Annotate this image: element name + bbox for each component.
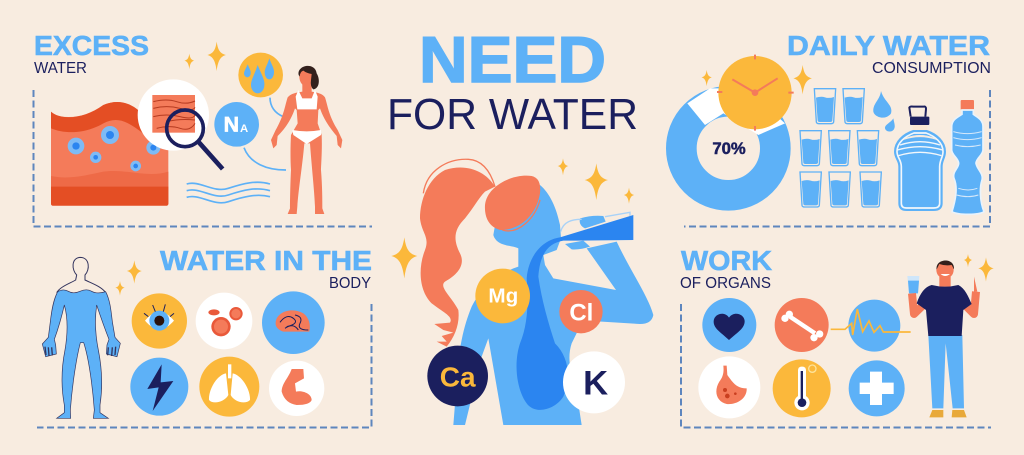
magnifier [138, 79, 223, 169]
sparkles [184, 42, 226, 71]
sparkles [702, 65, 812, 94]
heading: daily water consumption [787, 30, 991, 77]
badge: Ca [427, 346, 488, 406]
panel: daily water illustration [681, 55, 984, 214]
sodium badge: A [240, 123, 248, 135]
sparkles [391, 158, 634, 278]
glasses [800, 89, 881, 207]
heading: work of organs: OF ORGANS [680, 275, 771, 292]
bottle outline [561, 212, 630, 232]
heading: work of organs [680, 245, 772, 292]
icon: lightning [130, 358, 188, 416]
water stream [517, 215, 633, 410]
title: FOR WATER [387, 90, 638, 139]
icon: blood cells [196, 293, 252, 349]
heading: water in the body: WATER IN THE [160, 245, 372, 276]
badge: K [563, 351, 625, 413]
heading: excess water [34, 30, 149, 77]
body silhouette [453, 185, 653, 425]
badge: Mg [475, 269, 530, 323]
hand on bottle [565, 216, 606, 249]
badge: Cl [559, 290, 603, 333]
water drops [873, 91, 895, 132]
waves [187, 182, 270, 203]
plastic bottle [952, 100, 984, 214]
panel frame: body [37, 304, 372, 428]
donut chart 70%: 70% [712, 139, 746, 158]
water drops badge [238, 53, 283, 117]
panel frame: daily water [684, 90, 990, 226]
skin cross-section [51, 102, 168, 206]
donut chart 70% [681, 88, 785, 195]
hair [420, 159, 540, 347]
panel frame: organs [681, 304, 991, 428]
badge: Mg: Mg [488, 285, 518, 308]
sparkles [964, 254, 994, 282]
panel: work of organs illustration [698, 254, 994, 418]
body silhouette [42, 257, 120, 418]
badge: Ca: Ca [440, 362, 476, 393]
central figure drinking water [391, 158, 653, 425]
icon: lungs [199, 357, 259, 417]
heading: daily water consumption: CONSUMPTION [872, 60, 991, 77]
sparkles [115, 260, 142, 296]
clock [717, 55, 794, 131]
heading: excess water: WATER [34, 60, 87, 77]
icon: eye [132, 293, 187, 349]
large bottle [895, 106, 945, 210]
man with glass [907, 260, 977, 417]
heading: water in the body [160, 245, 372, 292]
icon: muscle [269, 361, 324, 416]
panel frame: excess water [34, 90, 372, 226]
icon: brain [262, 291, 325, 354]
panel: excess water illustration [51, 42, 342, 214]
heading: work of organs: WORK [681, 245, 772, 276]
heading: daily water consumption: DAILY WATER [787, 30, 990, 61]
heading: excess water: EXCESS [34, 30, 149, 61]
panel: water in the body illustration [42, 257, 325, 418]
icon: bone [775, 298, 829, 352]
sodium badge: N [224, 113, 239, 137]
icon: heart [702, 298, 756, 352]
woman figure [271, 66, 342, 214]
sodium badge [214, 102, 286, 170]
badge: Cl: Cl [569, 300, 593, 327]
title: NEED [419, 23, 606, 96]
icon: thermometer [773, 359, 831, 417]
icon: medical cross [849, 360, 905, 416]
icon: heart rate [831, 300, 911, 352]
heading: water in the body: BODY [329, 275, 371, 292]
icon: stomach [698, 356, 760, 418]
badge: K: K [583, 365, 608, 403]
title [387, 23, 638, 139]
